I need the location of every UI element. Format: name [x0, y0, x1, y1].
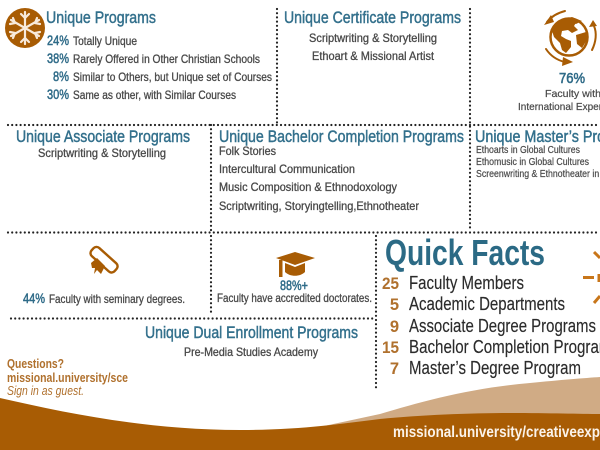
- heading: Unique Certificate Programs: [284, 9, 461, 27]
- list: program uniqueness percentages: 30%: [47, 87, 69, 102]
- list: bachelor programs: Scriptwriting, Storyingtelling,Ethnotheater: [219, 199, 419, 213]
- list: quick facts rows: 15: [382, 339, 399, 357]
- icon: orange burst: [583, 252, 600, 303]
- heading: Unique Dual Enrollment Programs: [145, 324, 358, 342]
- list: quick facts rows: 5: [390, 296, 399, 314]
- panel: international experience: [518, 11, 600, 113]
- heading: Unique Bachelor Completion Programs: [219, 128, 464, 146]
- list: program uniqueness percentages: Rarely Offered in Other Christian Schools: [73, 52, 260, 66]
- text: associate program: Scriptwriting & Storytelling: [38, 146, 166, 160]
- statistic: 88%+: 88%+: [280, 278, 308, 293]
- icon: diploma: [89, 245, 119, 274]
- icon: snowflake: [5, 8, 45, 48]
- statistic: 44%: 44%: [23, 291, 45, 306]
- contact block: missional.university/sce: [7, 371, 128, 385]
- list: program uniqueness percentages: Totally Unique: [73, 34, 137, 48]
- panel: accredited doctorates: [217, 252, 372, 305]
- footer wave: [0, 377, 600, 450]
- text: faculty label: Faculty with: [545, 88, 600, 100]
- text: doctorates label: Faculty have accredited doctorates.: [217, 291, 372, 305]
- icon: graduation cap: [276, 252, 315, 277]
- panel: seminary degrees: [23, 245, 185, 306]
- panel: unique programs: [5, 8, 272, 102]
- list: quick facts rows: Faculty Members: [409, 272, 524, 293]
- list: program uniqueness percentages: Same as other, with Similar Courses: [73, 88, 236, 102]
- panel: bachelor completion programs: [219, 128, 464, 213]
- list: quick facts rows: [382, 272, 600, 378]
- text: certificate program one: Scriptwriting & Storytelling: [309, 31, 437, 45]
- list: bachelor programs: [219, 144, 419, 213]
- list: program uniqueness percentages: [47, 33, 272, 102]
- list: quick facts rows: 7: [390, 360, 399, 378]
- contact block: [7, 357, 128, 398]
- heading: Unique Programs: [46, 9, 156, 27]
- heading: Unique Associate Programs: [16, 128, 190, 146]
- list: program uniqueness percentages: Similar to Others, but Unique set of Courses: [73, 70, 272, 84]
- panel: dual enrollment programs: [145, 324, 358, 359]
- list: master's programs: Ethoarts in Global Cultures: [476, 144, 580, 156]
- contact block: Sign in as guest.: [7, 384, 84, 398]
- statistic: 76%: 76%: [559, 70, 585, 87]
- text: seminary label: Faculty with seminary degrees.: [49, 292, 185, 306]
- list: program uniqueness percentages: 8%: [53, 69, 69, 84]
- list: program uniqueness percentages: 38%: [47, 51, 69, 66]
- contact block: Questions?: [7, 357, 64, 371]
- panel: master's programs: [475, 128, 600, 180]
- list: quick facts rows: 9: [390, 318, 399, 336]
- list: quick facts rows: 25: [382, 275, 399, 293]
- list: bachelor programs: Folk Stories: [219, 144, 276, 158]
- title: Quick Facts: [385, 232, 545, 273]
- panel: certificate programs: [284, 9, 461, 63]
- list: quick facts rows: Academic Departments: [409, 293, 565, 314]
- text: certificate program two: Ethoart & Missional Artist: [312, 49, 435, 63]
- list: master's programs: [476, 144, 600, 180]
- icon: globe with arrows: [544, 11, 597, 66]
- list: bachelor programs: Intercultural Communication: [219, 162, 355, 176]
- list: program uniqueness percentages: 24%: [47, 33, 69, 48]
- text: dual enrollment program: Pre-Media Studies Academy: [184, 345, 318, 359]
- panel: associate programs: [16, 128, 190, 160]
- panel: quick facts: [382, 232, 600, 378]
- list: bachelor programs: Music Composition & Ethnodoxology: [219, 180, 397, 194]
